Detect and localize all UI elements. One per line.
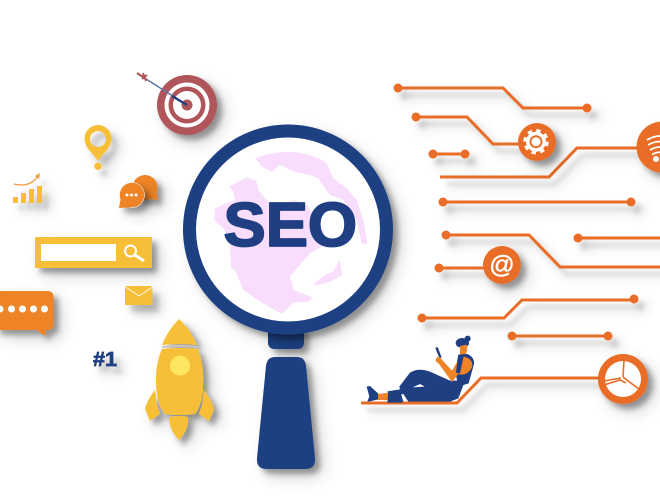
phone <box>435 347 442 358</box>
ankle <box>377 393 391 400</box>
icon: growth chart <box>13 173 42 203</box>
circuit lines and nodes <box>361 84 660 403</box>
legs <box>387 370 465 402</box>
icon: chat bubbles <box>119 175 158 208</box>
icon: location pin <box>84 125 112 170</box>
search bar <box>35 237 152 268</box>
back boot <box>367 386 378 401</box>
wifi waves <box>647 136 660 154</box>
icon: target with arrow <box>137 73 217 135</box>
rocket window <box>170 356 190 376</box>
envelope flap <box>126 287 152 296</box>
icon: pie chart <box>598 354 648 404</box>
rocket band <box>162 346 198 347</box>
hand <box>436 357 442 363</box>
hair <box>456 336 471 348</box>
magnifying glass <box>190 131 386 469</box>
wifi disc <box>636 122 660 172</box>
handle connector <box>268 325 304 349</box>
rocket parts <box>145 319 214 440</box>
bubble dots <box>126 194 138 196</box>
envelope body <box>125 286 152 305</box>
pie white face <box>605 361 641 397</box>
arm <box>437 357 472 382</box>
handle <box>257 357 315 469</box>
front boot <box>387 390 403 403</box>
vest <box>455 354 474 387</box>
circuit lines <box>361 88 660 403</box>
at disc <box>483 246 521 284</box>
back bubble <box>132 175 158 200</box>
arrow <box>137 73 187 105</box>
face and neck <box>460 345 467 355</box>
wifi dot <box>653 156 659 162</box>
rank label: #1 <box>93 349 117 371</box>
icon: message bubble <box>0 291 54 336</box>
pie disc <box>598 354 648 404</box>
icon: magnifier <box>125 246 144 261</box>
at glyph: @ <box>489 251 515 279</box>
bar background <box>35 237 152 268</box>
bubble dots <box>0 306 48 312</box>
icon: gear <box>518 123 556 161</box>
globe map <box>214 152 367 314</box>
icon: wifi <box>636 122 660 172</box>
vest strap <box>456 355 464 373</box>
target rings <box>157 75 217 135</box>
gear disc <box>518 123 556 161</box>
input field <box>41 244 116 261</box>
bubble body <box>0 291 54 336</box>
leg gap <box>413 384 425 387</box>
pie dividers <box>604 360 640 390</box>
lens ring <box>190 131 386 328</box>
SEO text: SEO <box>224 191 357 260</box>
gear glyph <box>525 131 547 153</box>
person with phone <box>367 336 474 403</box>
icon: rocket <box>145 319 214 440</box>
icon: envelope <box>125 286 152 305</box>
icon: at sign <box>483 246 521 284</box>
front bubble <box>119 182 144 208</box>
circuit nodes <box>394 84 638 340</box>
